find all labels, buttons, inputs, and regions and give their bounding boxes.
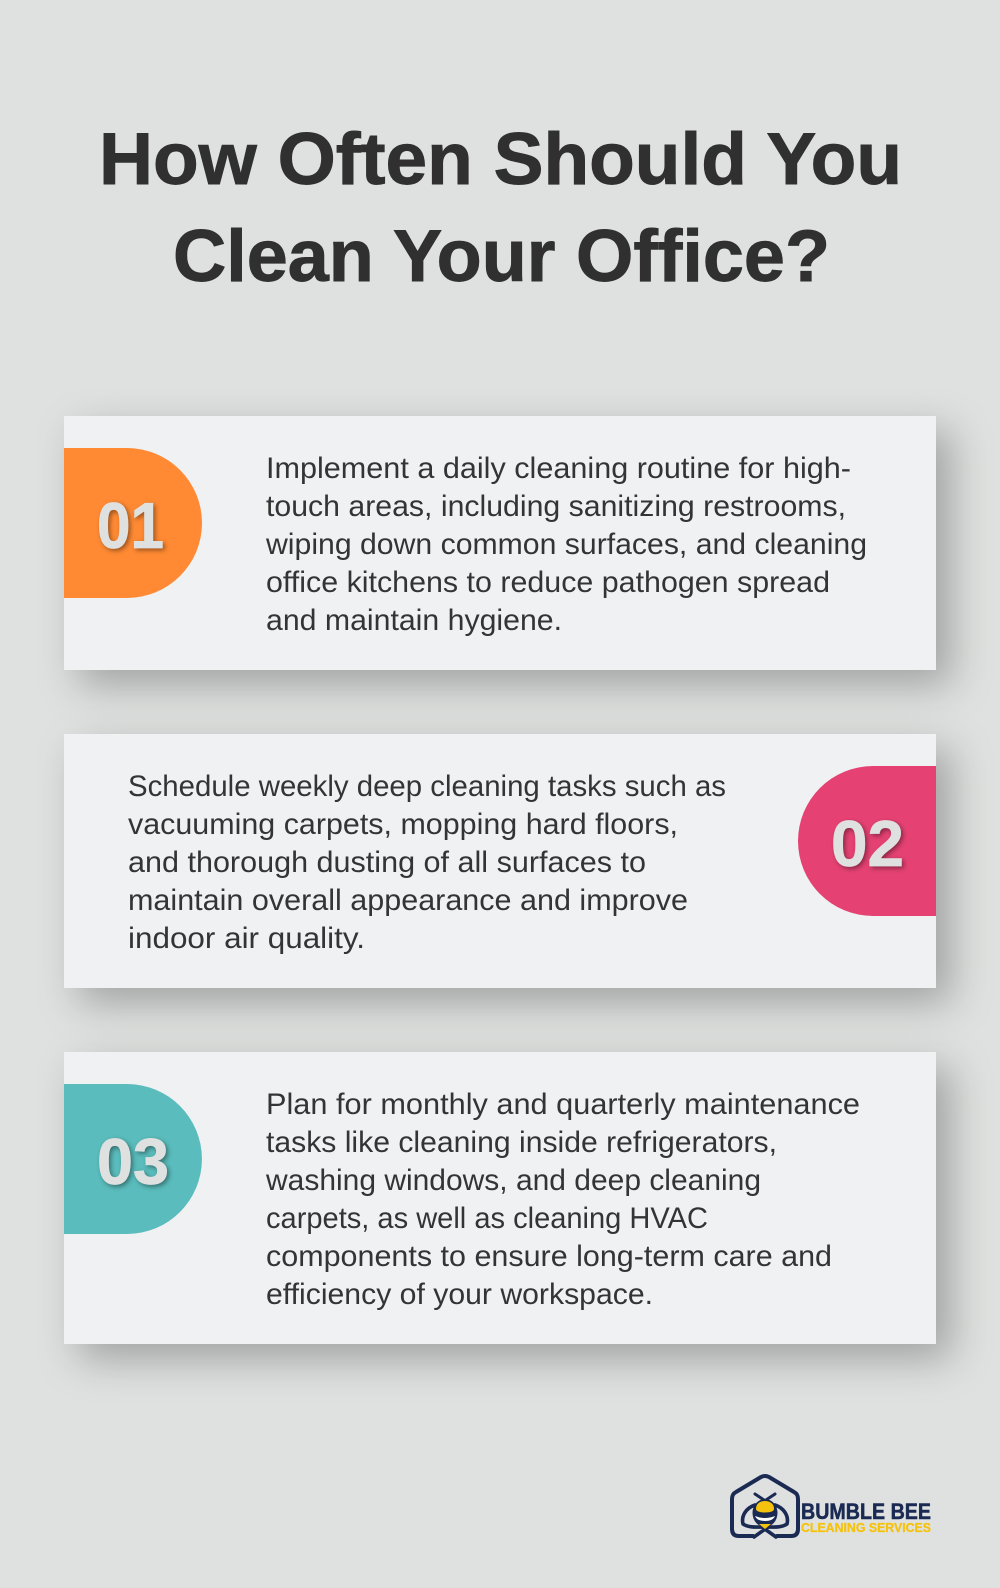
number badge 02: 02 (831, 807, 904, 880)
card background 01 (64, 416, 936, 670)
step 02 text: vacuuming carpets, mopping hard floors, (128, 808, 678, 841)
step 01 text (265, 452, 867, 637)
card background 03 (64, 1052, 936, 1344)
title (99, 119, 902, 297)
step 02 text (128, 770, 726, 955)
step 03 text: components to ensure long-term care and (266, 1240, 832, 1273)
step 03 text (265, 1088, 860, 1311)
logo: Bumble Bee Cleaning Services (732, 1476, 931, 1537)
logo wordmark: BUMBLE BEE (801, 1499, 931, 1524)
icon: house with bee (732, 1476, 798, 1537)
step 03 text: washing windows, and deep cleaning (265, 1164, 761, 1197)
step 03 text: Plan for monthly and quarterly maintenance (266, 1088, 860, 1121)
panel: step 01 (64, 416, 936, 670)
step 01 text: touch areas, including sanitizing restrooms, (266, 490, 846, 523)
step 02 text: maintain overall appearance and improve (128, 884, 688, 917)
step 02 text: and thorough dusting of all surfaces to (128, 846, 646, 879)
step 01 text: office kitchens to reduce pathogen spread (266, 566, 830, 599)
number badge 03 (64, 1084, 202, 1234)
panel: step 03 (64, 1052, 936, 1344)
step 01 text: Implement a daily cleaning routine for high- (266, 452, 851, 485)
card background 02 (64, 734, 936, 988)
title: How Often Should You (99, 119, 902, 200)
number badge 01: 01 (97, 489, 164, 562)
panel: step 02 (64, 734, 936, 988)
step 02 text: Schedule weekly deep cleaning tasks such as (128, 770, 726, 803)
logo tagline: CLEANING SERVICES (801, 1520, 931, 1535)
step 01 text: wiping down common surfaces, and cleaning (265, 528, 867, 561)
number badge 01 (64, 448, 202, 598)
step 03 text: efficiency of your workspace. (266, 1278, 653, 1311)
step 03 text: carpets, as well as cleaning HVAC (266, 1202, 708, 1235)
step 02 text: indoor air quality. (128, 922, 365, 955)
step 01 text: and maintain hygiene. (266, 604, 562, 637)
step 03 text: tasks like cleaning inside refrigerators, (266, 1126, 777, 1159)
title: Clean Your Office? (173, 216, 830, 297)
number badge 03: 03 (97, 1125, 169, 1198)
number badge 02 (798, 766, 936, 916)
